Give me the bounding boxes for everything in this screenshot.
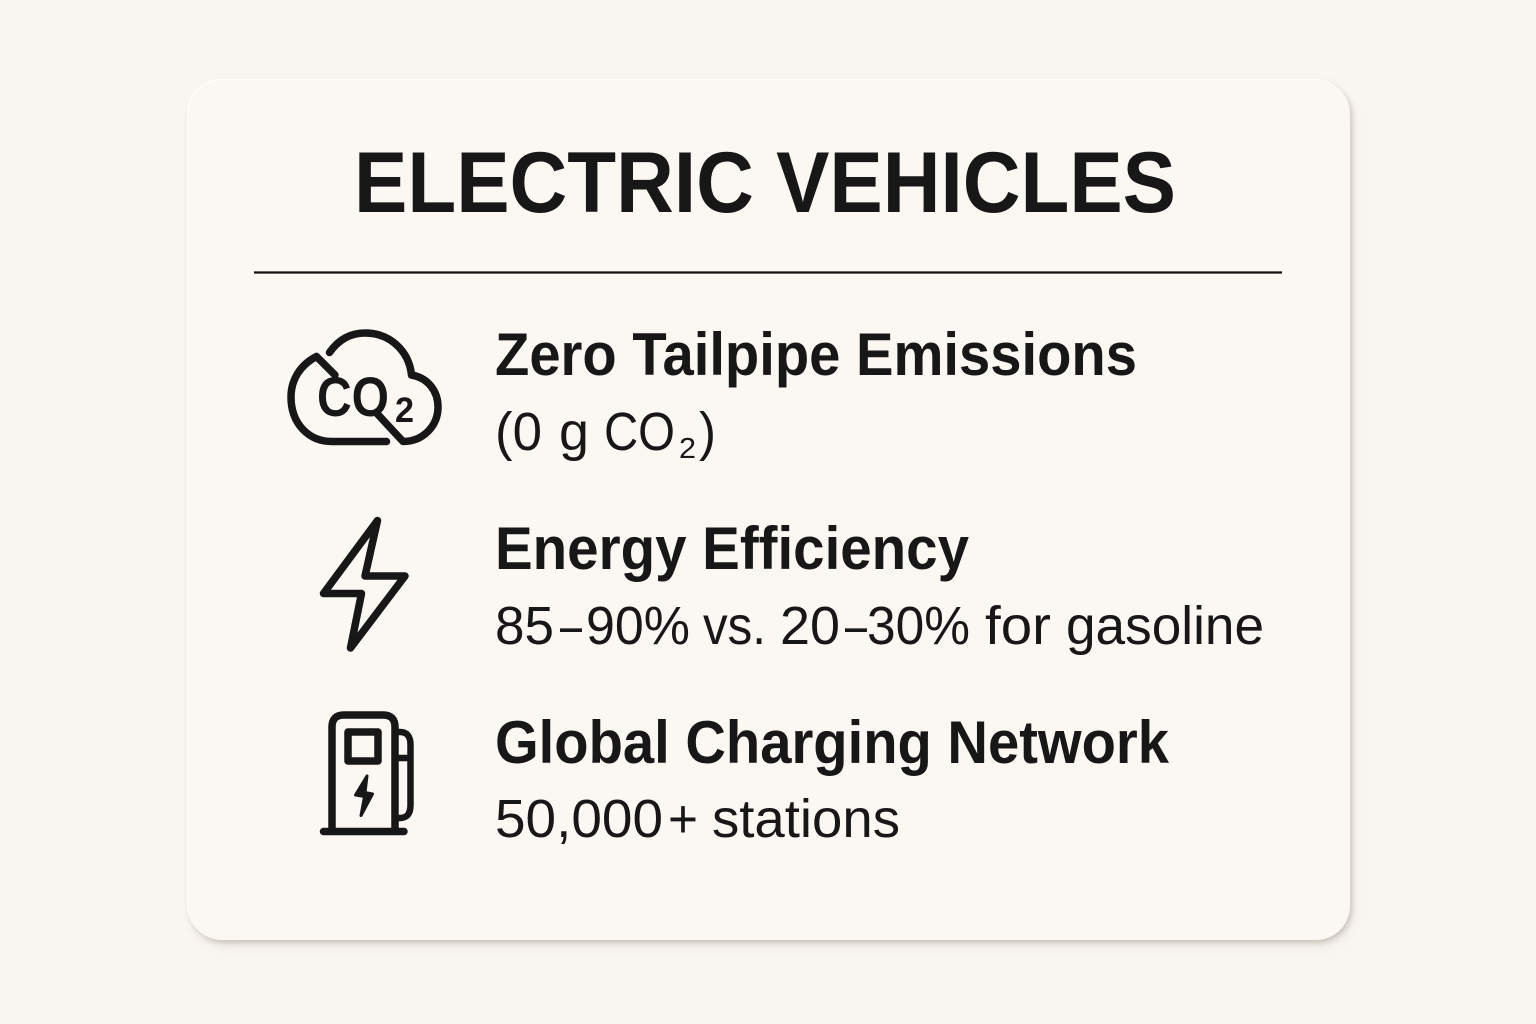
value: 0 g CO2: CO	[604, 402, 675, 462]
value: efficiency comparison: 85	[495, 596, 554, 656]
item: zero tailpipe emissions	[291, 321, 1137, 465]
value: efficiency comparison: gasoline	[1066, 596, 1264, 656]
value: station count: +	[668, 789, 698, 849]
value: efficiency comparison: 20	[780, 596, 840, 656]
value: efficiency comparison: vs.	[703, 596, 766, 656]
icon: CO2 cloud	[291, 333, 438, 442]
value: efficiency comparison: 30%	[867, 596, 970, 656]
heading: zero tailpipe emissions: Zero Tailpipe Emissions	[495, 321, 1137, 388]
value: efficiency comparison: 90%	[586, 596, 690, 656]
heading: global charging network: Global Charging Network	[495, 709, 1170, 776]
icon: CO2 cloud: CO	[317, 365, 389, 428]
value: 0 g CO2: )	[699, 402, 716, 462]
value: 0 g CO2	[495, 402, 716, 465]
item: global charging network	[324, 709, 1170, 849]
value: 0 g CO2: (0	[495, 402, 542, 462]
value: 0 g CO2: 2	[679, 433, 696, 465]
icon: CO2 cloud: 2	[395, 391, 414, 430]
title: ELECTRIC VEHICLES	[354, 135, 1176, 231]
icon: lightning bolt	[324, 520, 405, 648]
value: efficiency comparison	[495, 596, 1264, 656]
value: station count: 50,000	[495, 789, 663, 849]
panel: electric vehicles card	[188, 80, 1350, 940]
value: 0 g CO2: g	[559, 402, 589, 462]
value: efficiency comparison: –	[560, 596, 582, 656]
value: station count	[495, 789, 900, 849]
value: efficiency comparison: –	[845, 596, 867, 656]
value: efficiency comparison: for	[985, 596, 1051, 656]
heading: energy efficiency: Energy Efficiency	[495, 515, 970, 582]
item: energy efficiency	[324, 515, 1264, 656]
value: station count: stations	[712, 789, 900, 849]
icon: charging station	[324, 715, 410, 832]
